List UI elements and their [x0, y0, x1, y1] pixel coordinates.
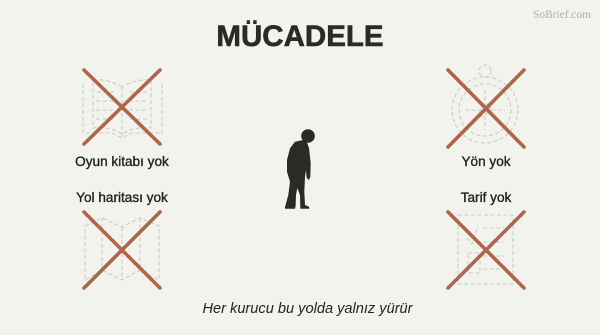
- icon: crossed-out recipe: [448, 212, 524, 288]
- label: no playbook: Oyun kitabı yok: [75, 154, 169, 169]
- label: no recipe: Tarif yok: [461, 190, 511, 205]
- icon: crossed-out map: [84, 212, 160, 288]
- icon: crossed-out compass: [448, 65, 524, 147]
- title: MÜCADELE: [216, 20, 384, 53]
- watermark: SoBrief.com: [533, 9, 591, 21]
- icon: slumped figure: [285, 129, 315, 209]
- caption: Her kurucu bu yolda yalnız yürür: [202, 301, 413, 317]
- label: no roadmap: Yol haritası yok: [76, 190, 168, 205]
- icon: crossed-out book: [83, 70, 162, 144]
- label: no direction: Yön yok: [461, 154, 511, 169]
